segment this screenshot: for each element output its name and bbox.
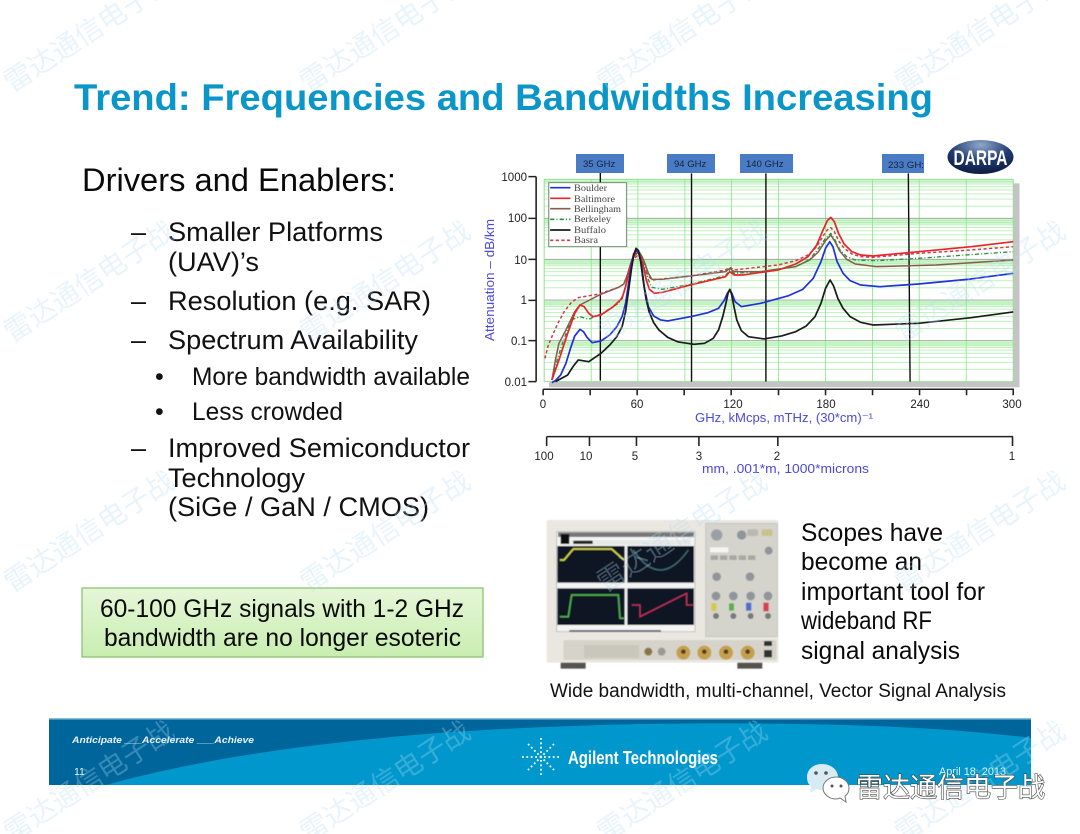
series: Berkeley — [552, 233, 1013, 380]
sub-item: less crowded: Less crowded — [192, 398, 343, 426]
caption: oscilloscope: Wide bandwidth, multi-channel, Vector Signal Analysis — [550, 681, 1006, 702]
wavelength labels — [534, 451, 1015, 463]
text: scopes note: wideband RF — [800, 607, 932, 635]
legend box — [549, 183, 627, 247]
x axis labels: 120 — [723, 399, 743, 411]
item: smaller platforms: – — [131, 217, 146, 247]
frequency tags: 233 GH: — [888, 160, 924, 171]
y axis labels: 10 — [514, 255, 527, 267]
x axis labels: 300 — [1002, 399, 1022, 411]
text: scopes note: important tool for — [801, 578, 985, 606]
callout: green box: 60-100 GHz signals with 1-2 GHz — [100, 595, 464, 623]
item: resolution: – — [131, 286, 146, 316]
text: scopes note: Scopes have — [801, 519, 943, 547]
heading: drivers and enablers: Drivers and Enablers: — [82, 162, 396, 198]
watermarks: 雷达通信电子战 — [886, 460, 1072, 601]
plot shadow — [549, 183, 1020, 387]
text: scopes note: become an — [801, 548, 922, 576]
item: smaller platforms: (UAV)’s — [168, 247, 259, 277]
x axis labels: 180 — [816, 399, 836, 411]
watermarks: 雷达通信电子战 — [0, 460, 181, 601]
scope screen — [557, 532, 695, 632]
sub-item: more bandwidth: • — [155, 363, 164, 391]
watermarks: 雷达通信电子战 — [588, 210, 774, 351]
frequency tags: 94 GHz — [674, 159, 706, 170]
legend labels: Boulder — [574, 183, 607, 193]
watermarks: 雷达通信电子战 — [886, 210, 1072, 351]
series: Basra — [545, 228, 1013, 358]
y axis labels — [501, 172, 527, 389]
x axis labels: 60 — [631, 399, 643, 411]
item: spectrum availability: Spectrum Availability — [168, 325, 418, 355]
wavelength labels: 1 — [1009, 451, 1015, 463]
series: Boulder — [552, 242, 1013, 383]
logo: DARPA — [948, 140, 1014, 174]
item: smaller platforms — [131, 217, 383, 277]
panel: drivers and enablers list — [82, 162, 470, 522]
footer tagline: Anticipate ___Accelerate ___Achieve — [71, 735, 255, 746]
x axis labels: 0 — [540, 399, 546, 411]
logo: DARPA: DARPA — [954, 147, 1008, 170]
icon: WeChat — [807, 764, 849, 802]
scope feet — [561, 663, 762, 669]
frequency marker lines — [600, 173, 910, 382]
series: Buffalo — [555, 248, 1013, 382]
scope control panel — [706, 523, 777, 637]
y axis labels: 0.1 — [511, 336, 527, 348]
Agilent Technologies wordmark: Agilent Technologies — [568, 748, 718, 768]
sub-item: less crowded: • — [155, 398, 164, 426]
item: spectrum availability: – — [131, 325, 146, 355]
y axis labels: 1 — [521, 295, 527, 307]
series: Bellingham — [552, 235, 1013, 380]
chart: atmospheric attenuation vs frequency — [483, 140, 1022, 476]
title: Trend: Frequencies and Bandwidths Increasing — [74, 77, 933, 118]
footer band — [49, 718, 1031, 785]
watermarks: 雷达通信电子战 — [291, 460, 477, 601]
legend labels: Baltimore — [574, 194, 615, 204]
text: scopes note: signal analysis — [801, 637, 960, 665]
series: Baltimore — [552, 217, 1013, 380]
wavelength labels: 10 — [580, 451, 592, 463]
x axis labels: 240 — [910, 399, 930, 411]
text: scopes note — [800, 519, 985, 665]
icon: Agilent spark — [522, 738, 560, 776]
legend swatches — [550, 188, 571, 240]
item: improved semiconductor technology: Technology — [168, 463, 305, 493]
watermark account name: 雷达通信电子战 — [856, 773, 1045, 803]
x axis GHz — [543, 389, 1014, 395]
y axis title: Attenuation – dB/km — [483, 219, 497, 341]
scope front connectors — [563, 640, 777, 660]
legend labels: Berkeley — [574, 214, 612, 224]
wavelength labels: 2 — [774, 451, 780, 463]
y axis labels: 1000 — [501, 172, 527, 184]
item: smaller platforms: Smaller Platforms — [168, 217, 383, 247]
scope body — [547, 520, 778, 663]
watermarks: 雷达通信电子战 — [291, 210, 477, 351]
wavelength labels: 3 — [696, 451, 702, 463]
item: improved semiconductor technology: – — [131, 433, 146, 463]
item: resolution: Resolution (e.g. SAR) — [168, 286, 431, 316]
date: April 18, 2013 — [939, 766, 1006, 778]
y axis labels: 0.01 — [505, 377, 527, 389]
watermarks: 雷达通信电子战 — [588, 460, 774, 601]
wavelength labels: 100 — [534, 451, 554, 463]
wavelength axis title: mm, .001*m, 1000*microns — [702, 462, 869, 476]
y axis labels: 100 — [508, 213, 527, 225]
item: improved semiconductor technology: Improved Semiconductor — [168, 433, 470, 463]
y axis ticks — [528, 177, 536, 382]
image: oscilloscope — [547, 520, 778, 669]
frequency tags: 140 GHz — [746, 159, 784, 170]
x axis wavelength — [547, 437, 1013, 446]
callout: green box: bandwidth are no longer esoteric — [104, 624, 461, 652]
wavelength labels: 5 — [632, 451, 638, 463]
frequency tags: 35 GHz — [583, 159, 615, 170]
item: improved semiconductor technology: (SiGe / GaN / CMOS) — [168, 492, 429, 522]
legend labels: Buffalo — [574, 225, 607, 235]
x axis labels — [540, 399, 1022, 411]
watermarks: 雷达通信电子战 — [0, 210, 181, 351]
page number: 11 — [74, 766, 85, 778]
legend labels: Basra — [574, 235, 598, 245]
legend labels — [574, 183, 621, 245]
x axis title: GHz, kMcps, mTHz, (30*cm)⁻¹ — [695, 411, 873, 425]
frequency tags — [576, 154, 924, 173]
plot grid — [544, 179, 1013, 382]
sub-item: more bandwidth: More bandwidth available — [192, 363, 470, 391]
legend labels: Bellingham — [574, 204, 621, 214]
callout: green box — [82, 588, 483, 657]
item: improved semiconductor technology — [131, 433, 470, 522]
